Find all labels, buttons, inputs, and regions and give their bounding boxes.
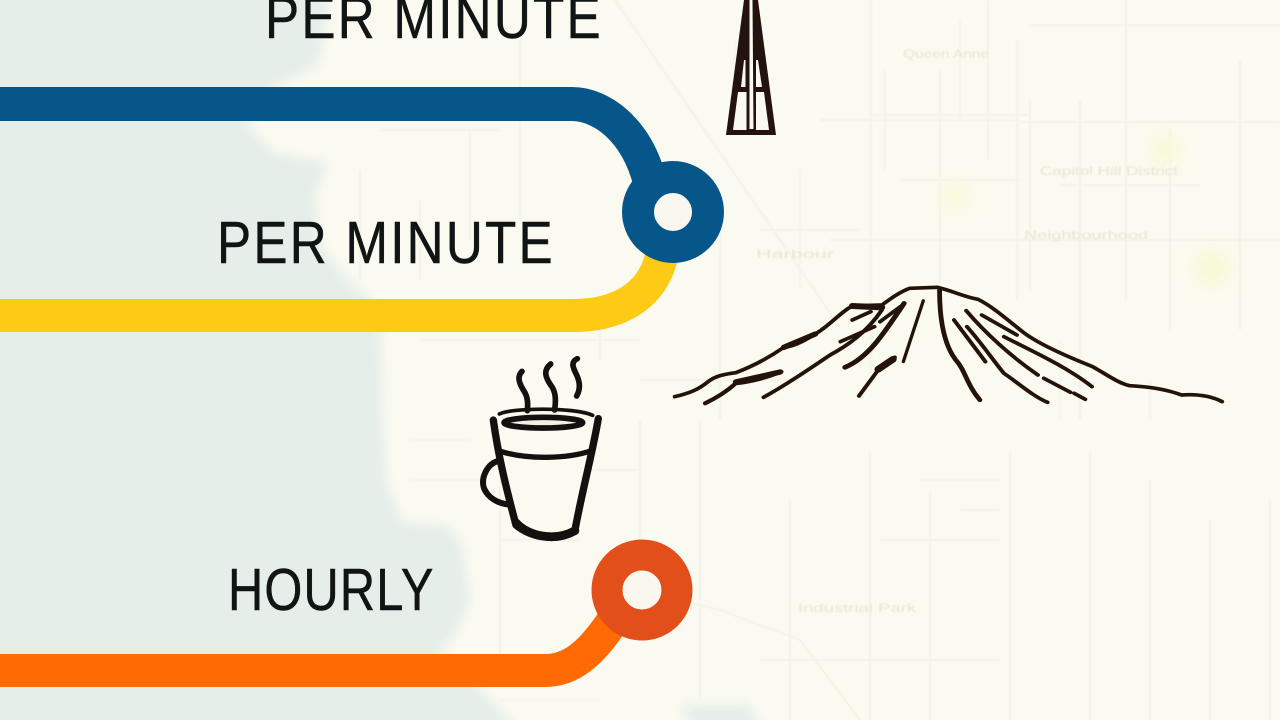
cup body — [493, 419, 598, 537]
route: orange line — [0, 622, 612, 670]
icon: space needle tower — [726, 0, 776, 135]
handle — [483, 461, 509, 505]
water area — [0, 0, 762, 720]
faint map labels — [756, 47, 1179, 615]
icon: coffee cup — [483, 359, 598, 537]
faint map labels: Industrial Park — [798, 601, 918, 615]
icon: mountain — [675, 287, 1222, 403]
faint map labels: Neighbourhood — [1024, 228, 1148, 242]
faint yellow parks — [942, 135, 1230, 286]
route: blue line — [0, 104, 650, 182]
label: hourly: HOURLY — [228, 556, 435, 623]
faint map labels: Harbour — [756, 247, 834, 261]
street grid — [360, 0, 1280, 720]
faint map labels: Queen Anne — [903, 47, 989, 61]
label: per minute: PER MINUTE — [217, 209, 555, 276]
route: yellow line — [0, 248, 663, 316]
station: blue — [638, 177, 708, 247]
station: orange — [607, 555, 677, 625]
rim — [499, 409, 593, 415]
steam — [519, 359, 579, 411]
faint map labels: Capitol Hill District — [1040, 164, 1179, 178]
